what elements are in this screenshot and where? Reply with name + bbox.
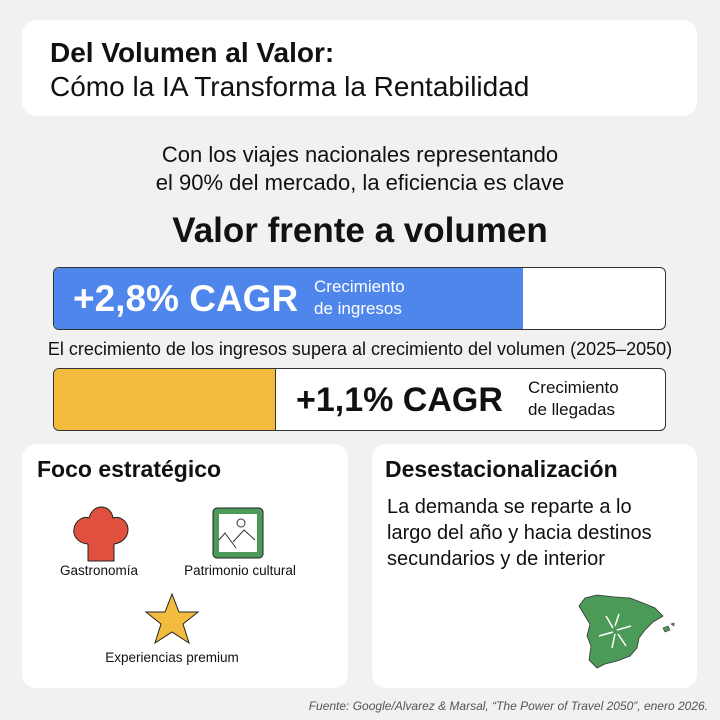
panel text — [387, 496, 652, 570]
panel text: secundarios y de interior — [387, 548, 605, 570]
subtitle text: el 90% del mercado, la eficiencia es clave — [156, 170, 564, 195]
title: Cómo la IA Transforma la Rentabilidad — [50, 71, 529, 102]
bar: revenue growth: Crecimiento — [314, 277, 405, 296]
icon: star — [144, 592, 200, 644]
comparison caption: El crecimiento de los ingresos supera al crecimiento del volumen (2025–2050) — [48, 339, 672, 359]
footer source: Fuente: Google/Alvarez & Marsal, “The Power of Travel 2050”, enero 2026. — [309, 699, 708, 713]
bar: arrivals growth — [53, 368, 666, 431]
panel: foco estratégico — [22, 444, 348, 688]
heading: valor frente a volumen: Valor frente a volumen — [172, 211, 548, 250]
title — [50, 37, 529, 102]
subtitle text — [156, 142, 564, 195]
bar: arrivals growth: Crecimiento — [528, 378, 619, 397]
title card — [22, 20, 697, 116]
icon: chef hat — [73, 506, 128, 562]
icon: picture frame — [212, 508, 264, 558]
bar: revenue growth: de ingresos — [314, 299, 402, 318]
panel heading: Foco estratégico — [37, 456, 221, 482]
bar: arrivals growth: +1,1% CAGR — [296, 381, 503, 419]
label: patrimonio: Patrimonio cultural — [184, 563, 296, 578]
panel heading: Desestacionalización — [385, 456, 618, 482]
subtitle text: Con los viajes nacionales representando — [162, 142, 558, 167]
bar: revenue growth: +2,8% CAGR — [73, 278, 298, 319]
bar: arrivals growth: de llegadas — [528, 400, 615, 419]
title: Del Volumen al Valor: — [50, 37, 334, 68]
label: gastronomia: Gastronomía — [60, 563, 138, 578]
panel text: largo del año y hacia destinos — [387, 522, 652, 544]
bar: revenue growth — [53, 267, 666, 330]
panel: desestacionalizacion — [372, 444, 697, 688]
icon: spain map with arrows — [578, 594, 674, 668]
panel text: La demanda se reparte a lo — [387, 496, 632, 518]
label: experiencias premium: Experiencias premium — [105, 650, 239, 665]
